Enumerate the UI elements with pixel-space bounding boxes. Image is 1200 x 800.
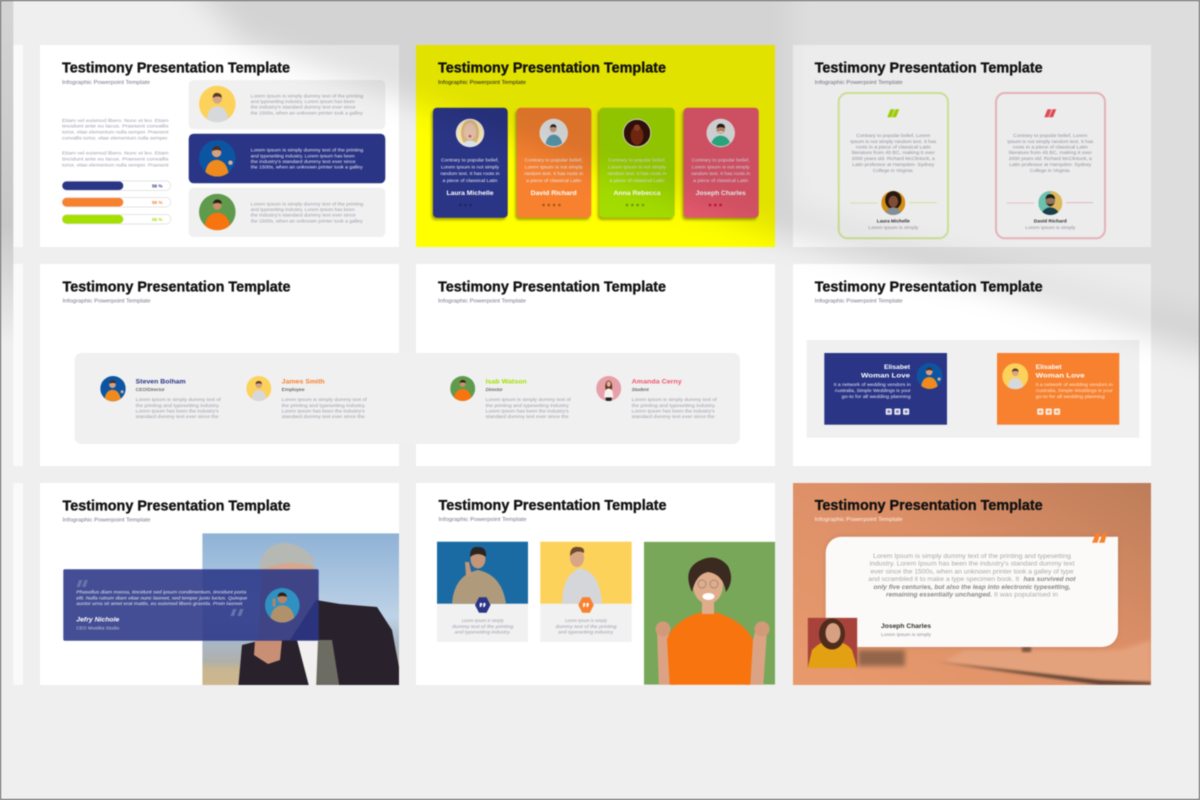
profile: Amanda Cerny: Amanda Cerny (632, 378, 682, 385)
profile card: Anna Rebecca: random text. It has roots in (608, 171, 667, 176)
profile: Isab Watson: Director (486, 387, 503, 392)
quote card: ever since the 1500s, when an unknown printer took a galley of type (870, 568, 1074, 575)
profile card: Anna Rebecca: Lorem Ipsum is not simply (608, 164, 667, 169)
photo card: yellow (540, 542, 632, 642)
quote card: green: Contrary to popular belief, Lorem (856, 133, 931, 138)
profile: James Smith: James Smith (282, 378, 325, 385)
banner: blue: go-to for all wedding planning (842, 394, 911, 399)
profile: Steven Bolham: CEO/Director (136, 387, 165, 392)
profile: Isab Watson: Isab Watson (486, 378, 527, 385)
quote card: and scrambled it to make a type specimen book. It (868, 576, 1020, 583)
testimonial card: bottom: the industry's standard dummy text ever since (251, 213, 356, 218)
text block: intro paragraphs: tincidunt ante eu lacus. Praesent convallis (62, 124, 170, 129)
closing quote mark (230, 609, 244, 616)
profile: Steven Bolham: the printing and typesetting industry. (136, 403, 220, 408)
testimonial card: bottom (189, 188, 385, 237)
slide 4: profiles (62, 279, 368, 419)
profile card: Joseph Charles: a piece of classical Latin (693, 178, 749, 183)
quote card: red: College in Virginia. (1030, 168, 1071, 173)
profile card: David Richard (515, 108, 591, 220)
profile: James Smith: standard dummy text ever since the (282, 414, 365, 419)
profile: Steven Bolham: Lorem Ipsum has been the industry's (136, 408, 220, 414)
profile: James Smith (246, 376, 368, 419)
title: Testimony Presentation Template (438, 497, 666, 514)
profile: Isab Watson: Lorem Ipsum has been the industry's (486, 408, 570, 414)
quote panel: CEO Mustika Studio (76, 626, 120, 630)
quote card: industry. Lorem Ipsum has been the industry's standard dummy text (870, 561, 1075, 568)
profile card: David Richard: David Richard (531, 190, 577, 197)
profile: Isab Watson: Lorem Ipsum is simply dummy text of (486, 397, 572, 402)
window light shadow overlay (0, 0, 1200, 370)
progress bars: 56 % (152, 184, 162, 189)
testimonial card: top: Lorem Ipsum is simply dummy text of the printing (251, 93, 364, 98)
banner: blue: Elisabet (884, 365, 910, 371)
title: Testimony Presentation Template (62, 279, 290, 296)
quote card: green: literature from 45 BC, making it over (852, 150, 935, 155)
profile: James Smith: Employee (282, 387, 305, 392)
title: Testimony Presentation Template (815, 497, 1043, 514)
title: Testimony Presentation Template (815, 279, 1043, 296)
quote card: It was popularised in (994, 592, 1059, 599)
testimonial card: bottom: and typesetting industry. Lorem Ipsum has been (251, 207, 355, 212)
text block: intro paragraphs: Etiam vel euismod libero. Nunc et leo. Etiam (62, 151, 169, 156)
profile: Amanda Cerny: Student (632, 387, 650, 392)
testimonial card: top: the 1500s, when an unknown printer took a galley (251, 111, 364, 116)
quote card: Lorem Ipsum is simply dummy text of the printing and typesetting (873, 553, 1072, 560)
photo card: yellow: Lorem Ipsum is simply (565, 618, 608, 623)
profile card: Laura Michelle: Laura Michelle (446, 190, 494, 197)
left slide edge slivers (13, 45, 23, 685)
quote card: remaining essentially unchanged. (886, 592, 992, 599)
portrait photo (808, 618, 857, 668)
profile card: Joseph Charles: Contrary to popular belief, (692, 158, 750, 163)
banner: orange (997, 353, 1119, 425)
testimonial card: middle highlighted: and typesetting industry. Lorem Ipsum has been (251, 153, 355, 158)
quote card: green: Latin professor at Hampden- Sydney (852, 162, 935, 167)
profile card: Laura Michelle: a piece of classical Latin (442, 178, 498, 183)
profile card: David Richard: Contrary to popular belief, (525, 158, 583, 163)
profile: James Smith: Lorem Ipsum has been the industry's (282, 408, 366, 414)
profile card: Laura Michelle (432, 108, 508, 220)
progress bars (62, 181, 171, 224)
text block: intro paragraphs: tincidunt ante eu lacus. Praesent convallis (62, 156, 170, 161)
profile: Amanda Cerny: standard dummy text ever since the (632, 414, 715, 419)
portrait photo (202, 533, 399, 690)
profile: Steven Bolham: Steven Bolham (136, 378, 186, 385)
quote card: red: David Richard (1034, 219, 1067, 224)
profile: Isab Watson: the printing and typesetting industry. (486, 403, 570, 408)
subtitle: Infographic Powerpoint Template (62, 80, 150, 86)
profile card: David Richard: Lorem Ipsum is not simply (525, 164, 584, 169)
testimonial card: middle highlighted (189, 134, 385, 183)
quote card: red: Contrary to popular belief, Lorem (1013, 133, 1088, 138)
subtitle: Infographic Powerpoint Template (438, 298, 526, 304)
profile: Amanda Cerny (596, 376, 718, 419)
text block: intro paragraphs: tortor, vitae elementum nulla semper. Praesent (62, 129, 169, 134)
title: Testimony Presentation Template (438, 60, 666, 77)
opening quote mark (76, 580, 88, 587)
profile: James Smith: the printing and typesetting industry. (282, 403, 366, 408)
quote panel: Phasellus diam massa, tincidunt sed ipsum condimentum, tincidunt porta (76, 590, 247, 594)
quote card: red (996, 93, 1105, 238)
quote card: green (839, 93, 948, 238)
quote card (826, 533, 1118, 647)
progress bars: 56 % (152, 217, 162, 222)
title: Testimony Presentation Template (815, 60, 1043, 77)
subtitle: Infographic Powerpoint Template (438, 80, 526, 86)
quote card: has survived not (1024, 576, 1076, 583)
profile: Amanda Cerny: the printing and typesetting industry. (632, 403, 716, 408)
quote card: red: Ipsum is not simply random text. It has (1007, 139, 1094, 144)
quote mark (1092, 533, 1107, 543)
profile card: Anna Rebecca: Anna Rebecca (614, 190, 661, 197)
slide 2: four coloured profile cards on yellow (416, 45, 775, 247)
quote card: Lorem Ipsum is simply (881, 632, 932, 637)
testimonial card: middle highlighted: the 1500s, when an unknown printer took a galley (251, 165, 364, 170)
quote card: green: Ipsum is not simply random text. It has (850, 139, 937, 144)
quote panel: elit. Nulla rutrum diam vitae nunc laoreet, sed tempor justo luctus. Quisque (76, 595, 248, 600)
slide 4 and 5 backgrounds (40, 264, 775, 466)
text block: intro paragraphs: Etiam vel euismod libero. Nunc et leo. Etiam (62, 118, 169, 123)
hexagon quote badge (578, 597, 594, 613)
quote card: green: Laura Michelle (877, 219, 910, 224)
profile card: Joseph Charles: Joseph Charles (696, 190, 746, 197)
banner: orange: It a network of wedding vendors in (1036, 382, 1113, 387)
slide 6: two profile banners (793, 264, 1151, 466)
subtitle: Infographic Powerpoint Template (62, 518, 151, 524)
profile card: Laura Michelle: random text. It has roots in (440, 171, 500, 176)
quote card: green: 2000 years old. Richard McClintock, a (852, 156, 935, 161)
slide 1: testimonials with progress bars (40, 45, 399, 247)
subtitle: Infographic Powerpoint Template (815, 298, 903, 304)
banner: blue: It a network of wedding vendors in (834, 382, 911, 387)
quote card: red: Lorem Ipsum is simply (1025, 225, 1076, 230)
profile: Isab Watson (450, 376, 572, 419)
photo card: blue: Lorem Ipsum is simply (462, 618, 504, 623)
quote panel: Jefry Nichole (76, 616, 120, 623)
profile card: Joseph Charles: random text. It has roots in (691, 171, 751, 176)
slide 4 and 5 shared wide panel (75, 353, 740, 444)
grey panel (807, 340, 1139, 438)
subtitle: Infographic Powerpoint Template (438, 517, 527, 523)
testimonial card: middle highlighted: Lorem Ipsum is simply dummy text of the printing (251, 148, 364, 153)
text block: intro paragraphs: convallis tortor, vitae elementum nulla semper. (62, 135, 168, 140)
hexagon quote badge (475, 597, 490, 613)
quote panel: auctor urna sit amet erat mattis, eu euismod libero gravida. Proin laoreet (76, 601, 243, 606)
profile card: Joseph Charles: Lorem Ipsum is not simply (692, 164, 751, 169)
quote card: red: roots in a piece of classical Latin (1013, 144, 1088, 150)
quote panel (63, 569, 319, 641)
photo card: yellow: and typesetting industry. (558, 630, 614, 635)
quote card: red: literature from 45 BC, making it over (1009, 150, 1092, 155)
title: Testimony Presentation Template (62, 498, 290, 514)
banner: blue: Woman Love (861, 374, 911, 380)
text block: intro paragraphs: tortor, vitae elementum nulla semper. Praesent (62, 162, 169, 167)
hero photo: excited man in orange (644, 542, 775, 690)
quote card: red: 2000 years old. Richard McClintock, a (1009, 156, 1092, 161)
quote card: red: Latin professor at Hampden- Sydney (1009, 162, 1092, 167)
text block: intro paragraphs (62, 118, 170, 167)
banner: orange: Australia, Simple Weddings is your (1036, 388, 1113, 393)
banner: orange: Woman Love (1036, 374, 1086, 380)
subtitle: Infographic Powerpoint Template (815, 80, 903, 86)
testimonial card: top (189, 80, 385, 129)
title: Testimony Presentation Template (438, 279, 666, 296)
subtitle: Infographic Powerpoint Template (62, 298, 151, 304)
profile card: Anna Rebecca: a piece of classical Latin (610, 178, 665, 183)
slide 7: portrait with quote overlay (40, 483, 399, 690)
testimonial card: bottom: Lorem Ipsum is simply dummy text of the printing (251, 201, 364, 206)
profile card: Joseph Charles (682, 108, 759, 220)
quote card: green: Lorem Ipsum is simply (868, 225, 919, 230)
title: Testimony Presentation Template (62, 60, 290, 77)
banner: blue: Australia, Simple Weddings is your (835, 388, 911, 393)
social icons (1037, 408, 1060, 415)
progress bars: 56 % (152, 200, 162, 205)
photo card: blue: dummy text of the printing (452, 624, 514, 629)
testimonial card: middle highlighted: the industry's standard dummy text ever since (251, 159, 356, 164)
quote card: green: College in Virginia. (873, 168, 914, 173)
testimonial card: bottom: the 1500s, when an unknown printer took a galley (251, 218, 364, 223)
quote card: Joseph Charles (881, 623, 932, 630)
slide 5: profiles (438, 279, 718, 419)
slide 8: photo cards and hero portrait (416, 483, 775, 690)
profile: Amanda Cerny: Lorem Ipsum is simply dummy text of (632, 397, 718, 402)
testimonial card: top: and typesetting industry. Lorem Ipsum has been (251, 99, 355, 104)
profile: Steven Bolham (100, 376, 222, 419)
banner: orange: Elisabet (1036, 365, 1062, 371)
social icons (886, 408, 909, 415)
slide 3: outlined quote cards (793, 45, 1151, 247)
profile card: Laura Michelle: Lorem Ipsum is not simply (441, 164, 500, 169)
banner: orange: go-to for all wedding planning (1036, 394, 1105, 399)
photo card: blue (437, 542, 528, 642)
testimonial card: top: the industry's standard dummy text ever since (251, 105, 356, 110)
photo card: blue: and typesetting industry. (455, 630, 511, 635)
profile card: Anna Rebecca: Contrary to popular belief, (608, 158, 666, 163)
profile card: Laura Michelle: Contrary to popular belief, (441, 158, 499, 163)
photo card: yellow: dummy text of the printing (556, 624, 617, 629)
profile: Steven Bolham: standard dummy text ever since the (136, 414, 219, 419)
subtitle: Infographic Powerpoint Template (815, 517, 903, 523)
profile: Amanda Cerny: Lorem Ipsum has been the industry's (632, 408, 716, 414)
banner: blue (824, 353, 947, 425)
quote card: only five centuries, but also the leap into electronic typesetting, (874, 584, 1071, 591)
profile card: David Richard: a piece of classical Latin (526, 178, 582, 183)
profile: Isab Watson: standard dummy text ever since the (486, 414, 569, 419)
quote card: green: roots in a piece of classical Latin (856, 144, 931, 150)
profile card: Anna Rebecca (598, 108, 675, 220)
profile card: David Richard: random text. It has roots in (524, 171, 584, 176)
profile: Steven Bolham: Lorem Ipsum is simply dummy text of (136, 397, 222, 402)
slide 9: quote card over blurred desk (793, 483, 1151, 685)
blurred book background (858, 640, 1151, 685)
profile: James Smith: Lorem Ipsum is simply dummy text of (282, 397, 368, 402)
